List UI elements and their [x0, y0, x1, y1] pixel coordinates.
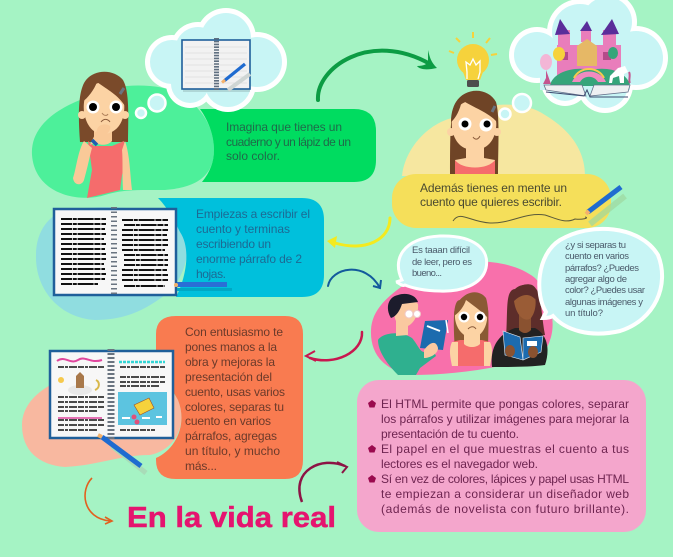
bullet list: los párrafos y utilizar imágenes para mejorar la — [381, 412, 629, 426]
icon: light bulb — [449, 32, 497, 87]
pink blob background — [371, 261, 553, 375]
idea text — [420, 181, 567, 209]
cloud: notebook thought — [145, 8, 287, 112]
draft text: hojas. — [196, 267, 226, 281]
panel: friends reading — [371, 261, 553, 375]
cyan text box — [158, 198, 324, 297]
improved story text: Con entusiasmo te — [185, 325, 283, 339]
cloud: castle thought — [509, 0, 668, 113]
improved story text — [185, 325, 285, 473]
speech text one: Es taaan difícil — [412, 245, 470, 256]
bullet list: El papel en el que muestras el cuento a tus — [381, 442, 629, 456]
yellow text box — [392, 174, 611, 228]
castle illustration — [540, 19, 630, 97]
bullet list: (además de novelista con futuro brillante). — [381, 502, 629, 516]
green blob background — [32, 86, 214, 198]
speech text two — [565, 240, 645, 319]
blue blob background — [36, 207, 187, 320]
arrow: crimson curve to improved version — [306, 332, 362, 361]
draft text: enorme párrafo de 2 — [196, 252, 302, 266]
thought bubbles: girl two — [500, 94, 531, 120]
improved story text: párrafos, agregas — [185, 429, 277, 443]
arrow: maroon curve to html summary — [299, 462, 347, 502]
colourful book — [50, 349, 174, 473]
bullet list: Sí en vez de colores, lápices y papel usas HTML — [381, 472, 629, 486]
draft text: cuento y terminas — [196, 222, 290, 236]
draft text: escribiendo un — [196, 237, 271, 251]
speech text one — [412, 245, 472, 279]
yellow dome background — [402, 105, 585, 176]
heading: En la vida real: En la vida real — [127, 502, 336, 534]
improved story text: colores, separas tu — [185, 400, 284, 414]
orange text box — [156, 316, 303, 479]
bullet list — [368, 397, 629, 516]
improved story text: cuento, usas varios — [185, 385, 285, 399]
speech text two: agregar algo de — [565, 274, 627, 285]
panel: first draft — [36, 198, 324, 320]
notebook icon — [182, 38, 250, 92]
improved story text: un título, y mucho — [185, 444, 280, 458]
notebook text: Imagina que tienes un — [226, 120, 342, 134]
idea text: cuento que quieres escribir. — [420, 195, 562, 209]
improved story text: pones manos a la — [185, 340, 277, 354]
pale orange blob — [22, 373, 181, 467]
character: worried girl — [450, 292, 492, 366]
bullet list: El HTML permite que pongas colores, separar — [381, 397, 629, 411]
arrow: yellow curve to draft — [327, 218, 390, 248]
thought bubbles: girl one — [136, 94, 166, 118]
speech text two: un título? — [565, 308, 603, 319]
notebook text: cuaderno y un lápiz de un — [226, 135, 351, 149]
notebook text: solo color. — [226, 149, 280, 163]
speech bubble: hard to read — [396, 236, 487, 291]
speech text two: algunas imágenes y — [565, 297, 643, 308]
draft text — [196, 207, 310, 281]
improved story text: presentación del — [185, 370, 272, 384]
panel: html summary — [357, 380, 646, 532]
character: girl with idea — [447, 91, 501, 174]
panel: notebook step — [32, 86, 376, 198]
speech text two: ¿y si separas tu — [565, 240, 626, 251]
improved story text: obra y mejoras la — [185, 355, 275, 369]
arrow: green curve to idea — [318, 50, 437, 100]
speech bubble: suggestions — [539, 229, 662, 334]
book with dense text — [54, 207, 232, 297]
speech text two: color? ¿Puedes usar — [565, 285, 645, 296]
bullet list: lectores es el navegador web. — [381, 457, 538, 471]
notebook text — [226, 120, 351, 163]
panel: story idea — [392, 91, 625, 228]
arrow: orange curve to real life — [85, 478, 112, 524]
character: thinking girl — [73, 72, 132, 198]
arrow: blue curve to friends — [328, 270, 381, 288]
character: man with glasses — [378, 294, 448, 375]
idea text: Además tienes en mente un — [420, 181, 567, 195]
character: woman with book — [492, 284, 548, 367]
speech text two: cuento en varios — [565, 251, 629, 262]
bullet list: te empiezan a considerar un diseñador web — [381, 487, 629, 501]
improved story text: cuento en varios — [185, 414, 271, 428]
draft text: Empiezas a escribir el — [196, 207, 310, 221]
speech text one: bueno... — [412, 268, 442, 279]
scribble line and pencil — [453, 187, 625, 224]
improved story text: más... — [185, 459, 217, 473]
speech text one: de leer, pero es — [412, 257, 472, 268]
panel: improved story — [22, 316, 303, 479]
green text box — [200, 109, 376, 182]
bullet list: presentación de tu cuento. — [381, 427, 519, 441]
speech text two: párrafos? ¿Puedes — [565, 263, 639, 274]
